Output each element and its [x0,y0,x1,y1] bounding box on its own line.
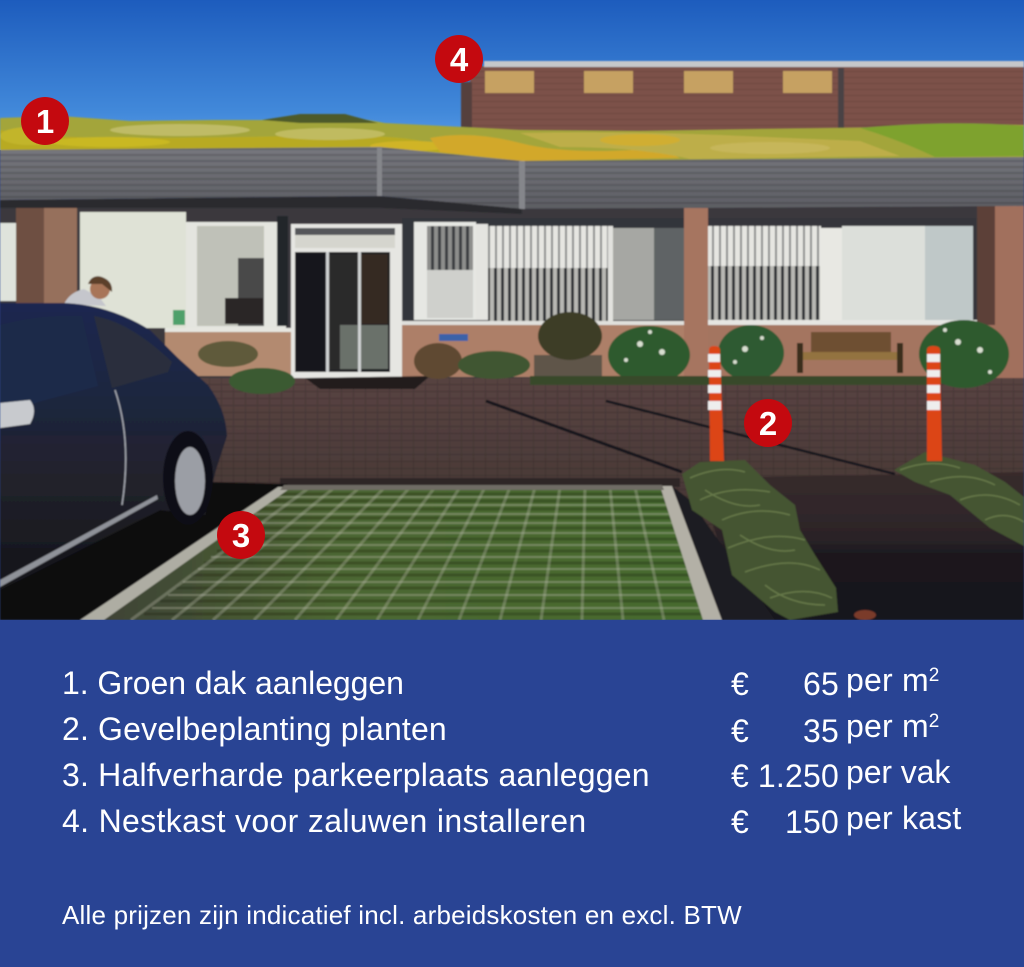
item 3 price: 1.250 [758,758,839,794]
scene photo group [0,61,1024,620]
item 1 unit: per m2 [846,662,939,698]
item 2 price: 35 [803,713,839,749]
brick column middle [684,208,708,380]
small red flowers [854,610,876,620]
window left panel [80,212,186,328]
brick column right [977,205,1024,380]
brick column left [16,202,77,307]
right kerb [660,486,722,620]
paver rows [144,494,704,614]
marker 3 [217,511,265,559]
nest box 1 [485,71,534,93]
car [0,303,227,590]
car door line [115,390,126,505]
dark band above grass [280,478,680,487]
marker 4: 4 [450,41,469,78]
car wheel rim [175,447,205,515]
item 4 label: 4. Nestkast voor zaluwen installeren [62,803,586,839]
marker 2 [744,399,792,447]
shrubs strip centre [682,460,838,620]
sky [0,0,1024,150]
item 3 euro sign: € [731,758,749,794]
top kerb [280,485,664,490]
blue sign [439,334,468,341]
entrance doors [291,224,402,378]
right windows [708,218,978,325]
marker 2: 2 [759,405,777,442]
item 1 euro sign: € [731,666,749,702]
car front side window [94,316,172,388]
bollard right [927,346,942,461]
facade planting [198,312,1009,394]
dark strip beside kerb [672,486,775,620]
marker 3: 3 [232,517,250,554]
person behind car [64,276,112,306]
car sill highlight [0,495,158,587]
middle windows [402,218,684,325]
left kerb [80,487,292,620]
bollard left [708,346,724,461]
item 4 price: 150 [785,804,839,840]
item 3 label: 3. Halfverharde parkeerplaats aanleggen [62,757,650,793]
item 4 euro sign: € [731,804,749,840]
low brick wall right [708,325,978,377]
low brick wall middle [402,325,684,377]
paving [0,378,1024,620]
roof fascia [0,147,1024,214]
item 1 price: 65 [803,666,839,702]
item 2 euro sign: € [731,713,749,749]
item 2 unit: per m2 [846,708,939,744]
green roof [0,114,1024,162]
shadows on paving [486,401,895,474]
item 1 label: 1. Groen dak aanleggen [62,665,404,701]
item 3 unit: per vak [846,754,950,790]
shrubs strip right [894,452,1024,546]
low brick wall left [165,330,293,376]
building facade [0,200,1024,380]
marker 1: 1 [36,103,54,140]
dark paving lower right [700,472,1024,620]
car mirror [0,400,34,428]
window left edge [0,223,16,301]
item 4 unit: per kast [846,800,961,836]
marker 4 [435,35,483,83]
price list panel [0,620,1024,967]
car rear side window [0,316,98,418]
car wheel arch and tyre [163,431,213,525]
grass paver parking space [80,485,722,620]
footnote: Alle prijzen zijn indicatief incl. arbeidskosten en excl. BTW [62,900,742,930]
rear brick building with nest boxes [461,61,1024,136]
photo illustration: building with green measures [0,0,1024,620]
item 2 label: 2. Gevelbeplanting planten [62,711,447,747]
nest box 4 [783,71,832,93]
door mat shadow [305,376,430,389]
display window [173,216,288,328]
bench [797,332,903,373]
nest box 2 [584,71,633,93]
dark ground shade beside car [0,482,288,620]
marker 1 [21,97,69,145]
nest box 3 [684,71,733,93]
